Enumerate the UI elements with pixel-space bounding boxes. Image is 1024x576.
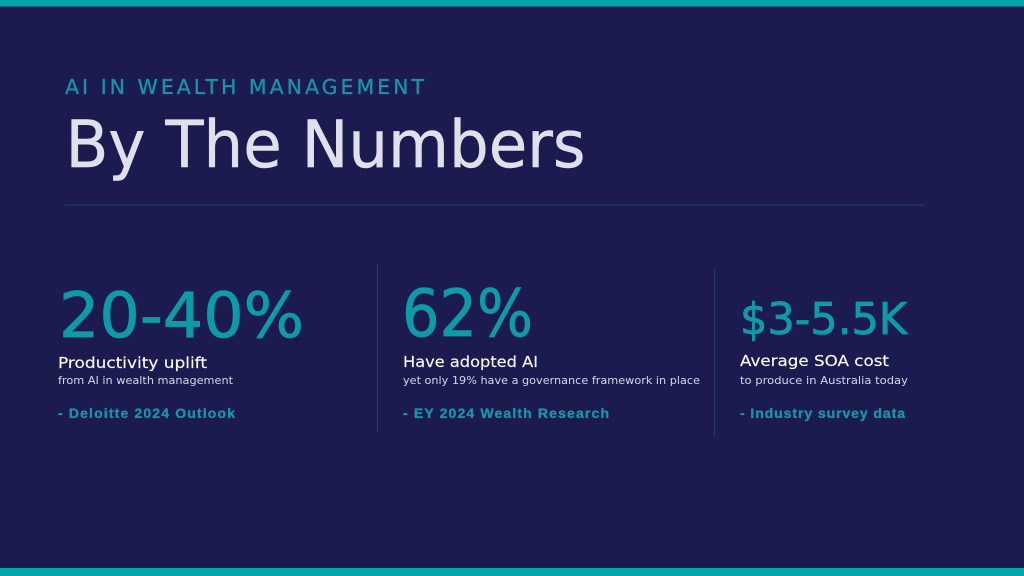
top accent bar — [0, 0, 1024, 6]
stat: $3-5.5K: $3-5.5K — [740, 294, 908, 345]
stat description: to produce in Australia today — [740, 374, 909, 387]
source: - EY 2024 Wealth Research — [403, 405, 609, 421]
stat heading: Average SOA cost — [740, 352, 889, 370]
stat description: yet only 19% have a governance framework in place — [403, 374, 700, 387]
title: By The Numbers — [66, 108, 586, 183]
stat: 62%: 62% — [402, 277, 533, 352]
stat heading: Productivity uplift — [58, 354, 207, 372]
panel: AI adoption — [402, 277, 700, 421]
eyebrow heading: AI IN WEALTH MANAGEMENT — [65, 75, 424, 99]
stat: 20-40%: 20-40% — [59, 279, 304, 352]
source: - Deloitte 2024 Outlook — [58, 405, 235, 421]
source: - Industry survey data — [740, 405, 905, 421]
bottom accent bar — [0, 568, 1024, 576]
panel: productivity uplift — [58, 279, 304, 421]
stat heading: Have adopted AI — [403, 353, 538, 371]
panel: SOA cost — [740, 294, 909, 421]
stat description: from AI in wealth management — [58, 374, 234, 387]
